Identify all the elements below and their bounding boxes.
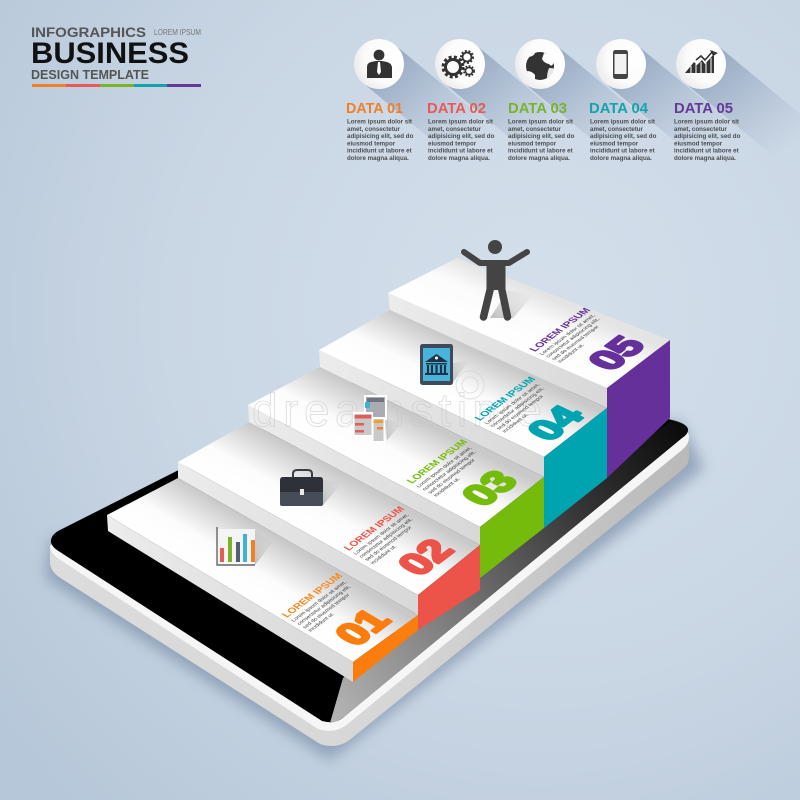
data 04: DATA 04 [589, 101, 648, 117]
step 3 heading and text: incididunt ut. [433, 477, 462, 498]
icon disc: globe [515, 39, 565, 89]
data 01 [346, 101, 414, 162]
screen reflection [330, 420, 688, 723]
data 05 [674, 101, 741, 162]
icon disc: gears [435, 39, 485, 89]
icon disc: phone [596, 39, 646, 89]
data 03 text: amet, consectetur [508, 126, 562, 133]
title colour bar [32, 84, 201, 87]
step 5 heading and text: sed do eiusmod tempor [551, 325, 601, 361]
step 2 number: 02 [389, 533, 463, 582]
data 05 text: incididunt ut labore et [674, 148, 739, 154]
step 2 heading and text: LOREM IPSUM [342, 505, 408, 552]
data 01 text: incididunt ut labore et [347, 148, 412, 154]
step 3 heading and text [405, 438, 494, 498]
step 5 heading and text: Lorem ipsum dolor sit amet, [539, 313, 598, 356]
step 2 content [342, 505, 463, 582]
step 2 heading and text: incididunt ut. [369, 544, 399, 565]
data 04 text: amet, consectetur [590, 126, 644, 133]
step 4 heading and text: sed do eiusmod tempor [495, 394, 546, 431]
step 2 heading and text: sed do eiusmod tempor [364, 525, 414, 562]
data 04 text: incididunt ut labore et [590, 148, 655, 154]
step 4 [319, 310, 607, 528]
data 03 text: eiusmod tempor [508, 140, 557, 147]
data 05 text: amet, consectetur [674, 126, 728, 133]
staircase [107, 258, 670, 682]
data 05: DATA 05 [674, 101, 733, 117]
data 01 text: eiusmod tempor [347, 140, 396, 147]
data 04 text: dolore magna aliqua. [590, 155, 652, 162]
step 5 heading and text: incididunt ut. [557, 343, 586, 364]
icon disc: person [354, 39, 404, 89]
long shadows behind the data icons [363, 45, 800, 166]
step 1 [107, 478, 418, 682]
data 01 text: dolore magna aliqua. [347, 155, 409, 162]
data 04 [589, 101, 657, 162]
data 04 text: Lorem ipsum dolor sit [590, 118, 655, 126]
icon: bank tablet [420, 344, 470, 385]
step 5 number: 05 [579, 331, 655, 376]
data 03 text: incididunt ut labore et [508, 148, 573, 154]
step 2 heading and text [342, 505, 431, 565]
step 5 heading and text: consectetur adipisicing elit, [545, 317, 602, 359]
data 01 text: adipisicing elit, sed do [347, 133, 414, 140]
data 05 text: Lorem ipsum dolor sit [674, 118, 739, 126]
data 02 text: dolore magna aliqua. [428, 155, 490, 162]
data 05 text: dolore magna aliqua. [674, 155, 736, 162]
title: infographics: INFOGRAPHICS [31, 25, 146, 41]
step 4 heading and text: Lorem ipsum dolor sit amet, [484, 383, 543, 425]
title block [31, 25, 201, 87]
step 3 [248, 367, 544, 578]
data 01 text: Lorem ipsum dolor sit [347, 118, 412, 126]
icon disc: growth chart [676, 39, 726, 89]
data 03 text: dolore magna aliqua. [508, 155, 570, 162]
data 02 text: Lorem ipsum dolor sit [428, 118, 493, 126]
tablet side [50, 420, 689, 746]
data 03 text: adipisicing elit, sed do [508, 133, 575, 140]
step 3 heading and text: sed do eiusmod tempor [427, 458, 477, 495]
data 03 text: Lorem ipsum dolor sit [508, 118, 573, 126]
data 02 text: eiusmod tempor [428, 140, 477, 147]
title: business: BUSINESS [31, 37, 189, 70]
icon: bar chart [217, 527, 273, 565]
step 4 heading and text: LOREM IPSUM [473, 376, 539, 422]
tablet rim [50, 420, 689, 731]
step 1 heading and text [280, 572, 368, 633]
tablet screen [51, 348, 688, 722]
data 02 text: adipisicing elit, sed do [428, 133, 495, 140]
step 4 number: 04 [518, 401, 594, 446]
step 4 heading and text [473, 376, 563, 434]
step 3 heading and text: Lorem ipsum dolor sit amet, [416, 446, 474, 489]
step 4 heading and text: incididunt ut. [501, 413, 531, 434]
data 02 [427, 101, 495, 162]
step 5 content [528, 307, 655, 376]
step 2 heading and text: consectetur adipisicing elit, [358, 517, 415, 559]
data 05 text: eiusmod tempor [674, 140, 723, 147]
title: design template: DESIGN TEMPLATE [31, 68, 149, 82]
step 1 heading and text: LOREM IPSUM [280, 572, 346, 620]
data 05 text: adipisicing elit, sed do [674, 133, 741, 140]
step 1 heading and text: sed do eiusmod tempor [302, 593, 352, 630]
data 03 [508, 101, 575, 162]
tablet soft shadow [46, 420, 704, 760]
step 3 heading and text: LOREM IPSUM [405, 438, 471, 485]
data 04 text: adipisicing elit, sed do [590, 133, 657, 140]
step 3 content [405, 438, 527, 512]
step 3 number: 03 [453, 465, 527, 512]
data 01 text: amet, consectetur [347, 126, 401, 133]
label: lorem ipsum: LOREM IPSUM [154, 28, 201, 37]
step 2 heading and text: Lorem ipsum dolor sit amet, [352, 513, 411, 556]
step 4 heading and text: consectetur adipisicing elit, [489, 387, 547, 428]
watermark: dreamstime [252, 384, 542, 436]
step 1 heading and text: Lorem ipsum dolor sit amet, [290, 580, 349, 623]
data 04 text: eiusmod tempor [590, 140, 639, 147]
step 5 heading and text [528, 307, 618, 364]
step 3 heading and text: consectetur adipisicing elit, [421, 450, 478, 492]
step 1 heading and text: incididunt ut. [307, 612, 337, 633]
step 4 content [473, 376, 594, 446]
data 02 text: amet, consectetur [428, 126, 482, 133]
data 02: DATA 02 [427, 101, 486, 117]
data 03: DATA 03 [508, 101, 567, 117]
step 5 [388, 258, 670, 478]
step 1 heading and text: consectetur adipisicing elit, [296, 585, 353, 626]
icon: briefcase [280, 470, 343, 506]
step 1 content [280, 572, 400, 652]
step 1 number: 01 [326, 603, 400, 652]
icon: documents [353, 395, 400, 443]
icon: standing person [464, 240, 533, 318]
tablet device [46, 348, 704, 760]
data 02 text: incididunt ut labore et [428, 148, 493, 154]
step 5 heading and text: LOREM IPSUM [528, 307, 594, 353]
data 01: DATA 01 [346, 101, 403, 117]
step 2 [178, 422, 480, 630]
